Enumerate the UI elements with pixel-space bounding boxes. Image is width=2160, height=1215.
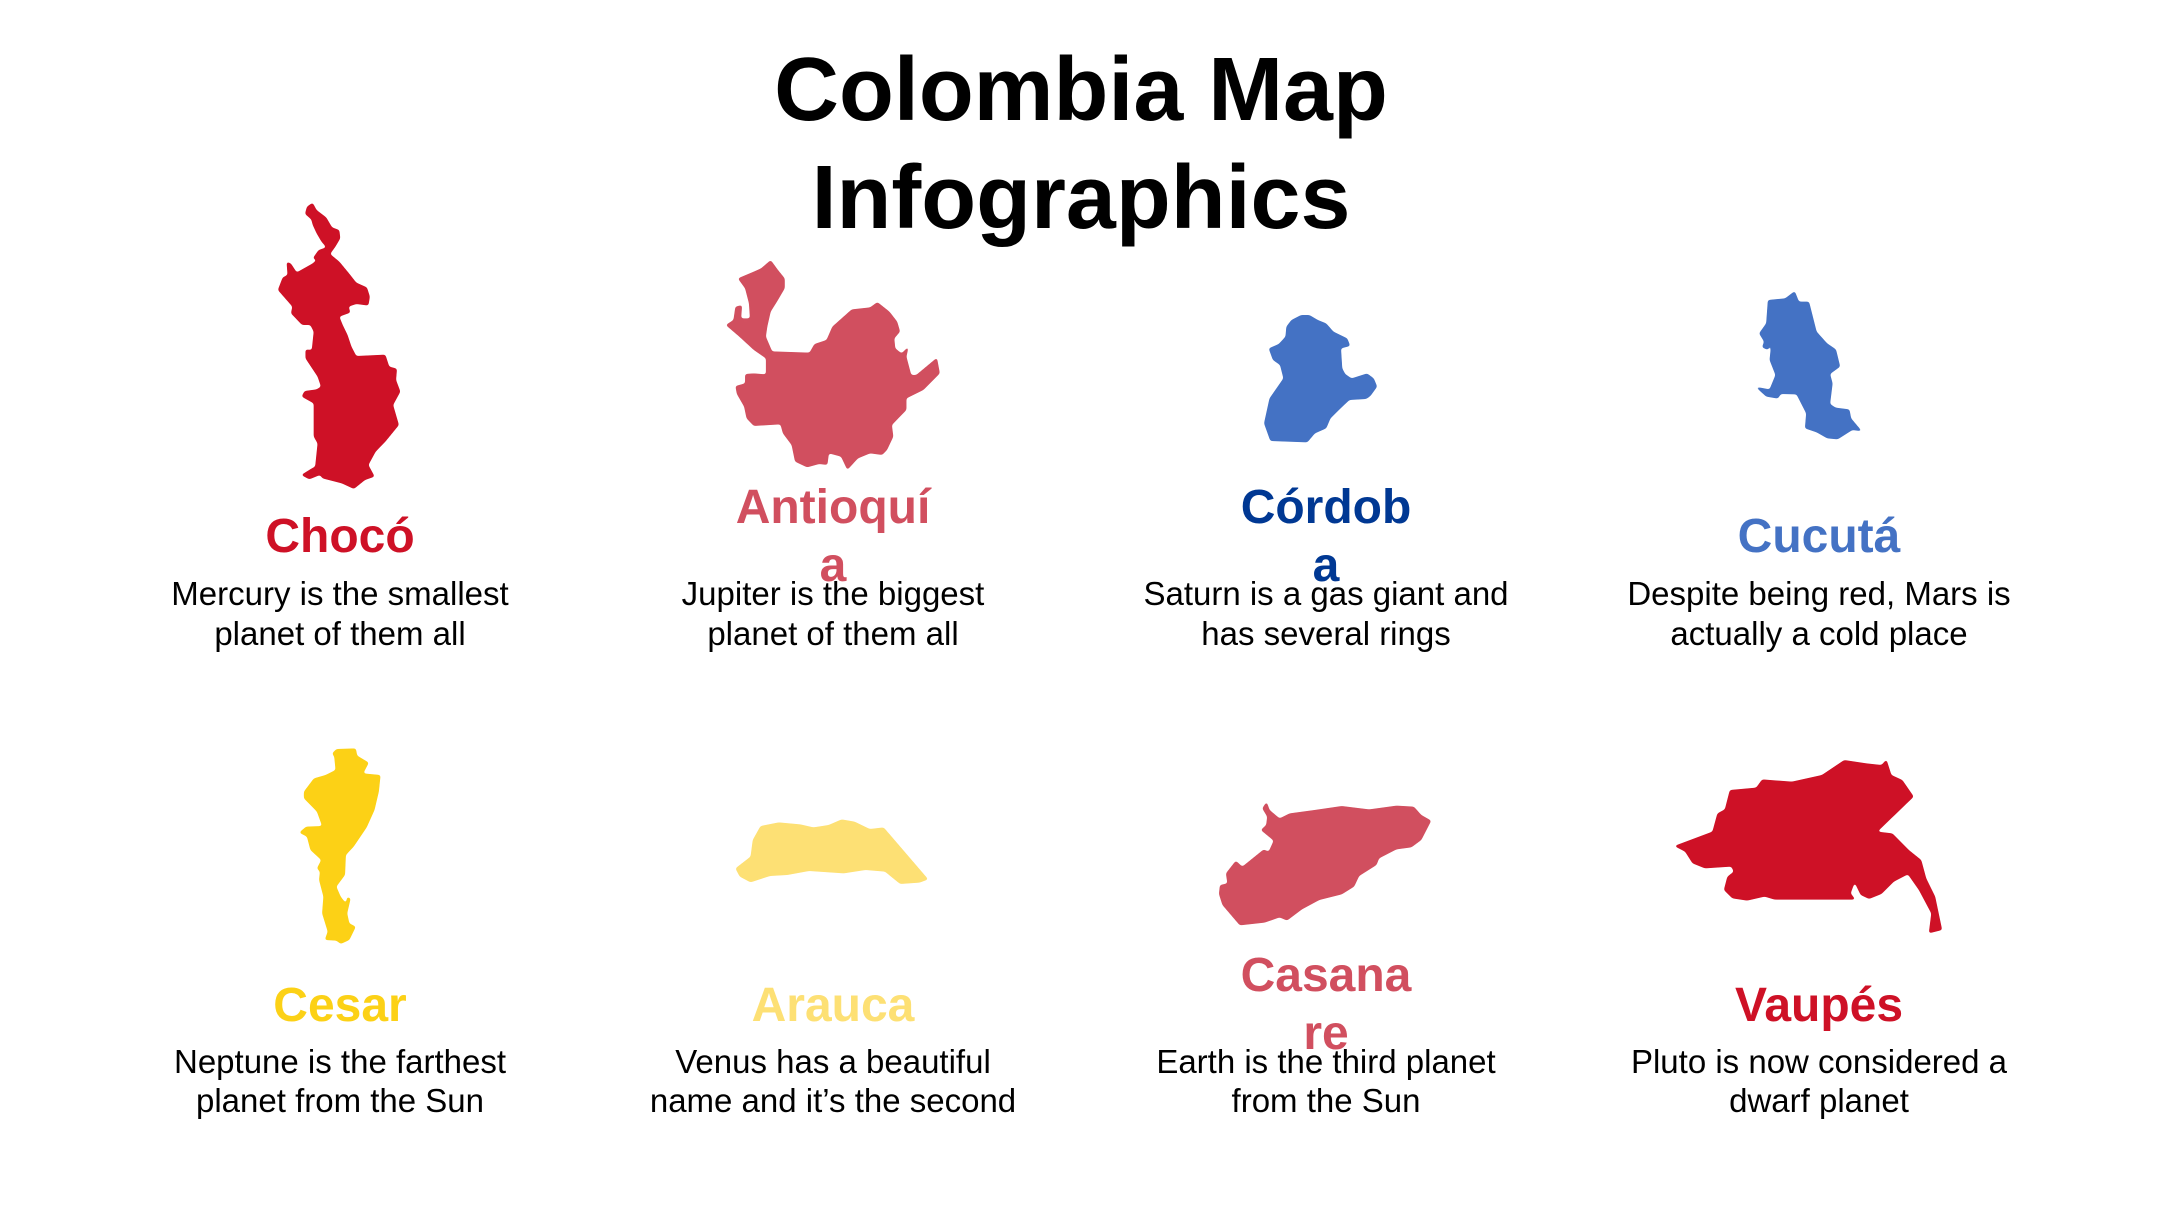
panel: Cucutá bbox=[1627, 291, 2011, 652]
heading: Casanare: re bbox=[1303, 1007, 1349, 1060]
text: Cesar description: Neptune is the farthest bbox=[174, 1043, 506, 1080]
heading: Córdoba bbox=[1241, 481, 1411, 592]
heading: Casanare: Casana bbox=[1241, 949, 1412, 1002]
icon: Córdoba map bbox=[1264, 315, 1377, 442]
heading: Cucutá: Cucutá bbox=[1738, 510, 1901, 563]
text: Córdoba description: Saturn is a gas giant and bbox=[1143, 575, 1509, 612]
text: Cesar description bbox=[174, 1043, 506, 1119]
icon: Vaupés map bbox=[1674, 759, 1942, 933]
text: Arauca description: Venus has a beautiful bbox=[675, 1043, 991, 1080]
panel: Chocó bbox=[171, 203, 509, 652]
title: Infographics bbox=[812, 148, 1350, 248]
heading: Casanare bbox=[1241, 949, 1412, 1060]
icon: Casanare map bbox=[1219, 802, 1431, 925]
heading: Chocó: Chocó bbox=[265, 510, 415, 563]
panel: Vaupés bbox=[1631, 759, 2008, 1119]
heading: Antioquía: Antioquí bbox=[736, 481, 932, 534]
icon: Arauca map bbox=[735, 819, 928, 884]
panel: Casanare bbox=[1156, 802, 1496, 1119]
heading: Cesar: Cesar bbox=[273, 979, 407, 1032]
text: Cucutá description bbox=[1627, 575, 2011, 652]
text: Córdoba description bbox=[1143, 575, 1509, 652]
text: Chocó description: planet of them all bbox=[214, 615, 466, 652]
text: Antioquía description: planet of them all bbox=[707, 615, 959, 652]
text: Chocó description: Mercury is the smallest bbox=[171, 575, 509, 612]
heading: Córdoba: a bbox=[1313, 539, 1340, 592]
heading: Antioquía bbox=[736, 481, 932, 592]
icon: Chocó map bbox=[278, 203, 400, 489]
heading: Antioquía: a bbox=[820, 539, 847, 592]
text: Arauca description: name and it’s the second bbox=[650, 1082, 1016, 1119]
panel: Cesar bbox=[174, 748, 506, 1119]
heading: Vaupés: Vaupés bbox=[1735, 979, 1903, 1032]
heading: Arauca: Arauca bbox=[752, 979, 915, 1032]
title bbox=[774, 40, 1388, 248]
text: Antioquía description bbox=[682, 575, 984, 652]
text: Córdoba description: has several rings bbox=[1201, 615, 1451, 652]
panel: Antioquía bbox=[682, 260, 984, 652]
text: Chocó description bbox=[171, 575, 509, 652]
text: Casanare description: from the Sun bbox=[1232, 1082, 1420, 1119]
icon: Cesar map bbox=[299, 748, 381, 944]
panel: Córdoba bbox=[1143, 315, 1509, 652]
text: Cesar description: planet from the Sun bbox=[196, 1082, 484, 1119]
icon: Antioquía map bbox=[726, 260, 940, 470]
heading: Córdoba: Córdob bbox=[1241, 481, 1411, 534]
title: Colombia Map bbox=[774, 40, 1388, 140]
text: Arauca description bbox=[650, 1043, 1016, 1119]
text: Antioquía description: Jupiter is the biggest bbox=[682, 575, 984, 612]
icon: Cucutá map bbox=[1755, 291, 1862, 439]
text: Vaupés description: dwarf planet bbox=[1729, 1082, 1909, 1119]
text: Vaupés description: Pluto is now considered a bbox=[1631, 1043, 2008, 1080]
text: Vaupés description bbox=[1631, 1043, 2008, 1119]
text: Cucutá description: Despite being red, Mars is bbox=[1627, 575, 2011, 612]
text: Casanare description bbox=[1156, 1043, 1496, 1119]
text: Casanare description: Earth is the third planet bbox=[1156, 1043, 1496, 1080]
text: Cucutá description: actually a cold place bbox=[1670, 615, 1968, 652]
panel: Arauca bbox=[650, 819, 1016, 1119]
